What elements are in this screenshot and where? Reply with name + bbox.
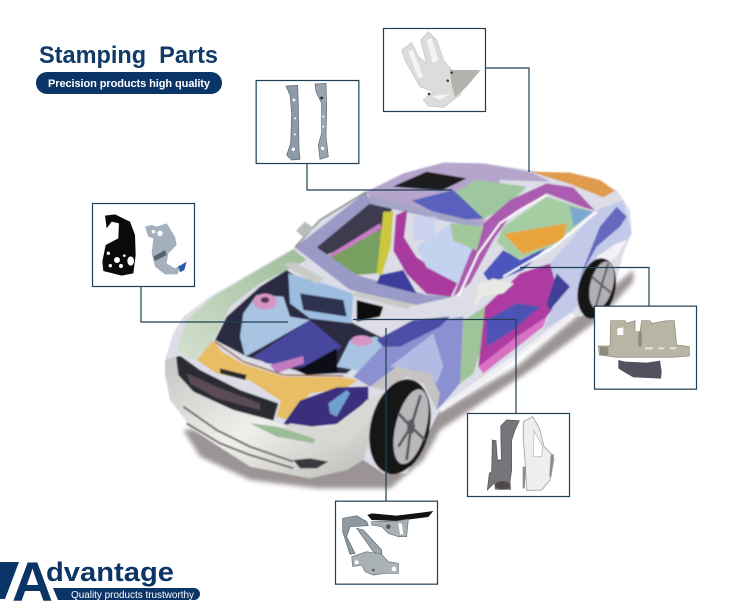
bulkhead xyxy=(288,273,353,323)
car shadow xyxy=(183,270,633,488)
front fender xyxy=(353,317,463,410)
logo tagline pill xyxy=(53,588,200,600)
roof interior xyxy=(453,180,527,218)
advantage logo xyxy=(0,550,200,611)
part box: top bracket xyxy=(383,28,485,111)
front bumper xyxy=(165,357,377,478)
part box: pillar bars xyxy=(256,80,359,163)
rear window interior xyxy=(497,197,593,260)
part box: left brackets xyxy=(92,203,194,286)
engine bay bar xyxy=(253,320,342,367)
grille xyxy=(176,356,278,421)
rear quarter xyxy=(543,200,632,330)
roof arch xyxy=(453,183,595,297)
sunroof xyxy=(393,172,467,191)
radiator support xyxy=(197,340,358,420)
rear deck xyxy=(530,172,615,197)
windshield interior xyxy=(323,223,385,275)
hood xyxy=(177,249,307,360)
logo word: dvantage xyxy=(46,557,174,587)
right headlight xyxy=(283,387,368,427)
yellow A pillar xyxy=(377,212,393,275)
title: Stamping Parts xyxy=(39,42,218,69)
left strut tower xyxy=(240,295,310,357)
connector lines xyxy=(141,68,649,501)
door mirror xyxy=(474,278,514,307)
logo slanted block xyxy=(0,562,19,599)
subtitle pill: Precision products high quality xyxy=(48,78,211,90)
part box: B pillar parts xyxy=(467,413,569,496)
logo tagline: Quality products trustworthy xyxy=(71,589,195,601)
cowl strips xyxy=(283,262,323,284)
magenta pillar and floor xyxy=(393,210,457,297)
car illustration xyxy=(165,163,633,488)
car body xyxy=(165,163,632,478)
roof xyxy=(367,163,550,223)
part box: hinge xyxy=(335,501,437,584)
left mirror xyxy=(296,222,314,237)
part box: floor panels xyxy=(594,306,696,389)
rear wheel xyxy=(571,254,622,323)
seats xyxy=(417,224,480,283)
door xyxy=(460,307,485,383)
front wheel xyxy=(360,373,440,481)
subtitle pill xyxy=(36,72,222,94)
engine bay xyxy=(215,270,387,373)
right strut tower xyxy=(337,337,392,372)
rocker and door internals xyxy=(478,263,563,373)
